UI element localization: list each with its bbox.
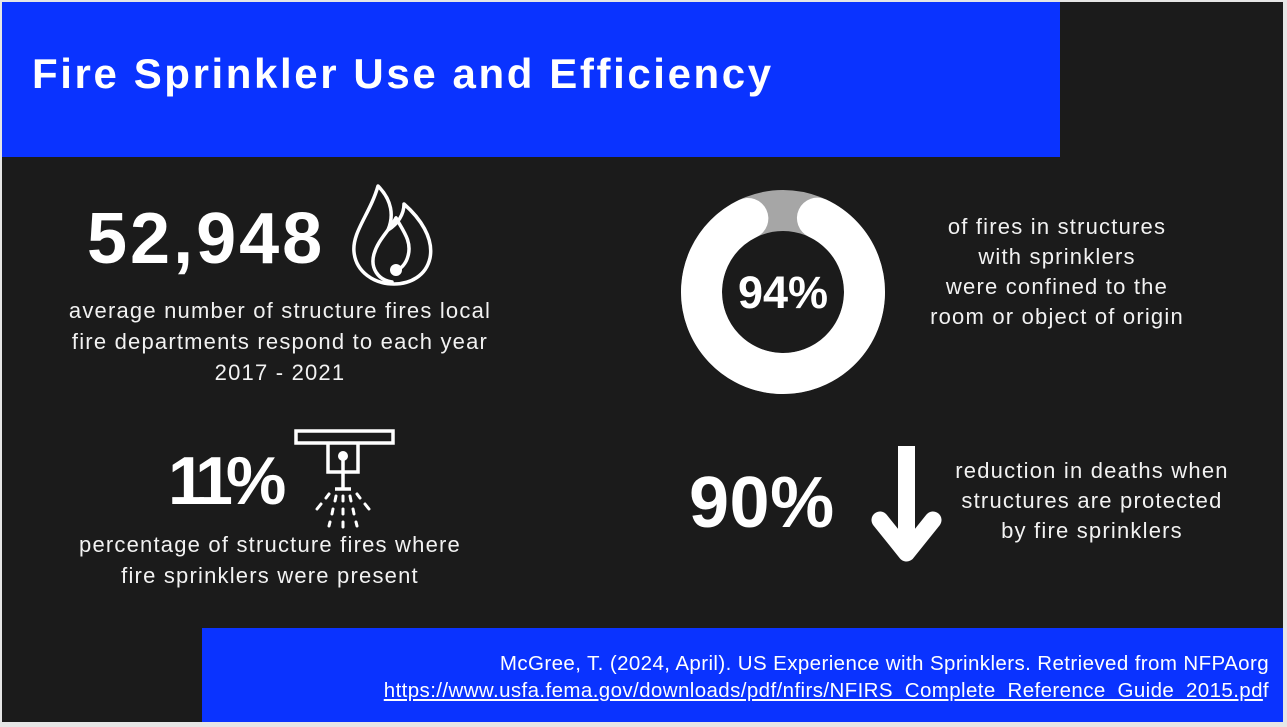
donut description: with sprinklers (978, 244, 1136, 269)
description: 2017 - 2021 (215, 360, 345, 385)
description (79, 532, 461, 588)
stat: 90%: 90% (689, 463, 835, 543)
stat: 11% (79, 443, 461, 588)
description: fire sprinklers were present (121, 563, 419, 588)
90% description: reduction in deaths when (955, 458, 1229, 483)
donut description (930, 214, 1184, 329)
donut description: were confined to the (946, 274, 1168, 299)
stat: 52,948 (69, 199, 491, 385)
title: Fire Sprinkler Use and Efficiency (32, 50, 774, 97)
description: percentage of structure fires where (79, 532, 461, 557)
90% description: structures are protected (961, 488, 1223, 513)
donut description: of fires in structures (948, 214, 1166, 239)
donut chart 94% (681, 190, 885, 394)
label 94%: 94% (738, 267, 828, 318)
citation: McGree, T. (2024, April). US Experience with Sprinklers. Retrieved from NFPAorg (500, 652, 1269, 675)
donut description: room or object of origin (930, 304, 1184, 329)
source banner (202, 628, 1283, 722)
90% description (955, 458, 1229, 543)
90% description: by fire sprinklers (1001, 518, 1183, 543)
citation (384, 652, 1269, 702)
icon: flame (352, 184, 432, 286)
citation: https://www.usfa.fema.gov/downloads/pdf/nfirs/NFIRS_Complete_Reference_Guide_2015.pdf (384, 679, 1269, 702)
title banner (2, 2, 1060, 157)
description: average number of structure fires local (69, 298, 491, 323)
description: fire departments respond to each year (72, 329, 488, 354)
icon: sprinkler (294, 429, 395, 528)
icon: down arrow (872, 446, 942, 562)
description (69, 298, 491, 385)
number 11%: 11% (168, 443, 279, 519)
number 52,948: 52,948 (87, 199, 325, 279)
